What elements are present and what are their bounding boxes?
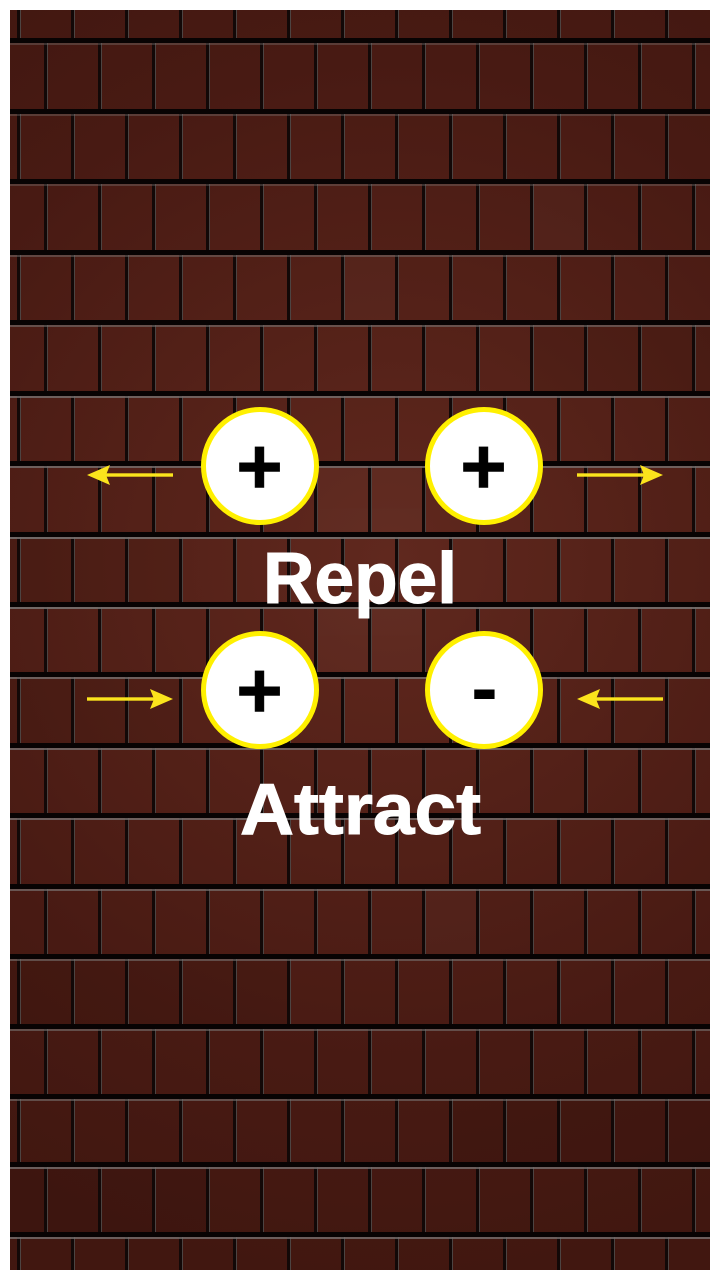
heading: Attract: Attract <box>240 770 481 850</box>
repel row: left positive charge: + <box>236 422 283 511</box>
repel row: right positive charge: + <box>460 422 507 511</box>
repel row: right arrow pointing right <box>577 465 663 485</box>
attract row: positive charge <box>204 634 316 746</box>
attract row: left arrow pointing right <box>87 689 173 709</box>
attract row: negative charge: - <box>471 643 498 732</box>
attract row: positive charge: + <box>236 646 283 735</box>
repel row: left positive charge <box>204 410 316 522</box>
attract row: right arrow pointing left <box>577 689 663 709</box>
repel row: right positive charge <box>428 410 540 522</box>
heading: Repel: Repel <box>263 539 457 619</box>
repel row: left arrow pointing left <box>87 465 173 485</box>
attract row: negative charge <box>428 634 540 746</box>
